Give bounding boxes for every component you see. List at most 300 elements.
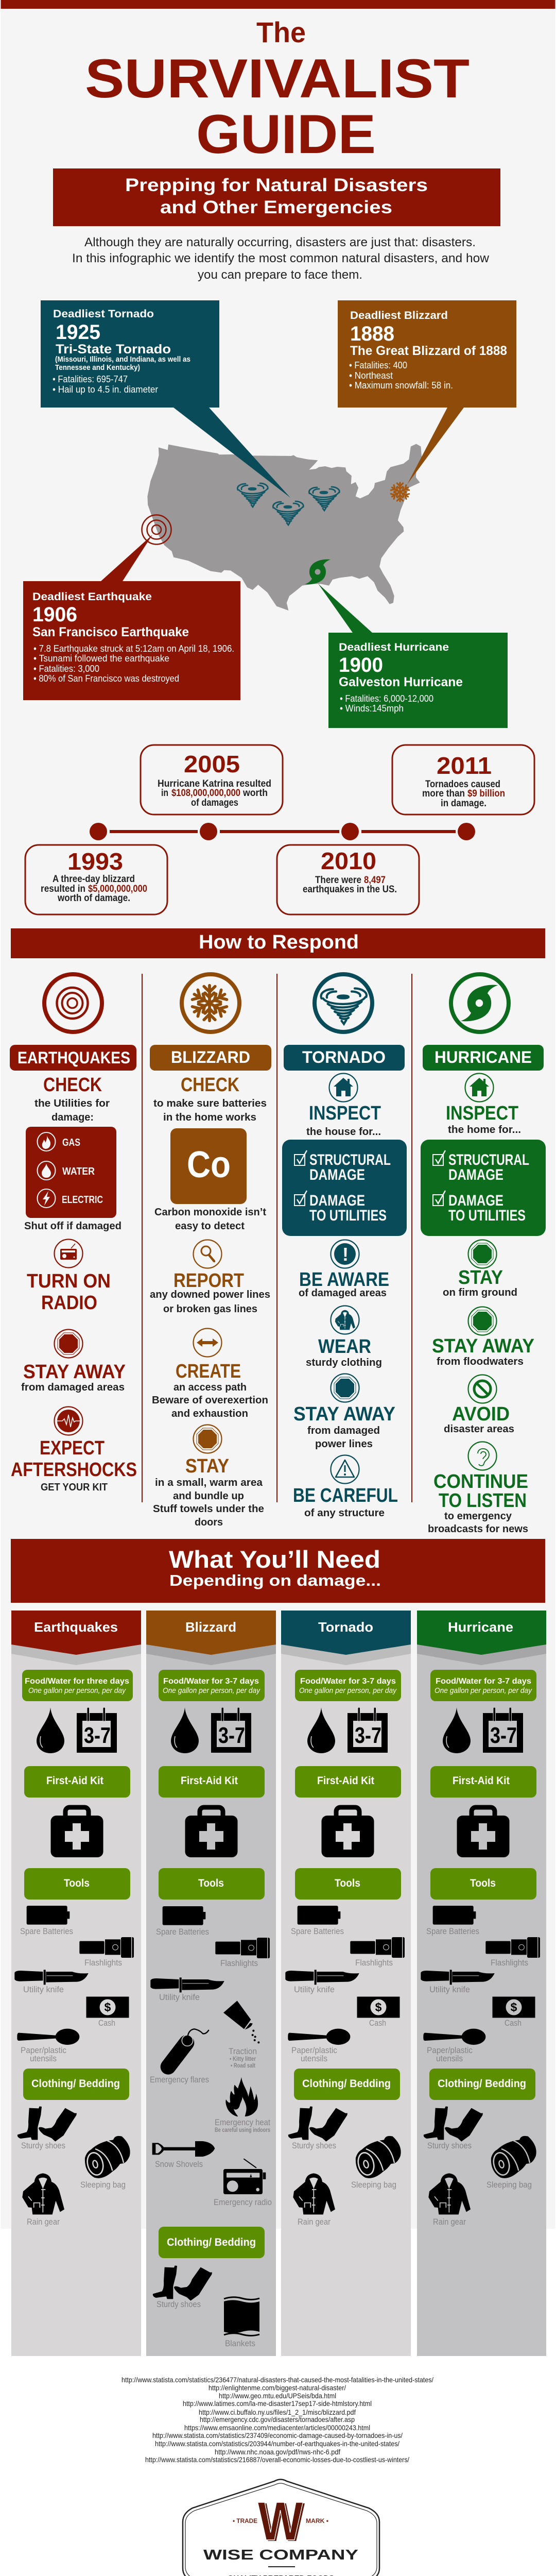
item: cash [86, 1997, 129, 2028]
icon: stop [331, 1374, 359, 1402]
step: check utilities [34, 1074, 110, 1123]
item: cash: $ [105, 2001, 111, 2014]
step: stay: doors [195, 1517, 223, 1528]
item: traction: Traction [229, 2046, 257, 2056]
column: tornado response [282, 974, 407, 1519]
pill: first-aid kit [295, 1766, 401, 1798]
item: cash [357, 1997, 399, 2028]
icon: map tornado markers [237, 483, 339, 525]
icon: alert [331, 1240, 359, 1268]
step: expect aftershocks [11, 1437, 137, 1493]
item: rain gear: Rain gear [433, 2217, 466, 2227]
source links: http://www.ci.buffalo.ny.us/files/1_2_1/misc/blizzard.pdf [199, 2408, 356, 2416]
subtitle banner [53, 168, 500, 226]
text: carbon monoxide note: easy to detect [175, 1221, 245, 1232]
text: shut off: Shut off if damaged [24, 1221, 121, 1232]
panel: deadliest hurricane: • Fatalities: 6,000-12,000 [340, 693, 433, 704]
item: sturdy shoes [288, 2106, 348, 2150]
panel: blizzard supplies [146, 1611, 276, 2356]
icon: no entry [468, 1375, 496, 1403]
panel: deadliest blizzard: • Fatalities: 400 [349, 360, 407, 370]
icon: alert: ! [342, 1244, 349, 1265]
item: electric: ELECTRIC [62, 1194, 103, 1206]
pill: first-aid kit: First-Aid Kit [46, 1775, 103, 1787]
item: spare batteries: Spare Batteries [156, 1927, 209, 1937]
item: rain gear: Rain gear [298, 2217, 331, 2227]
item: cash: Cash [98, 2018, 115, 2028]
step: check utilities: CHECK [43, 1074, 102, 1096]
item: blankets: Blankets [225, 2338, 255, 2348]
step: inspect [306, 1103, 381, 1138]
panel: deadliest earthquake: • Tsunami followed the earthquake [33, 653, 169, 664]
heading: what you'll need: Depending on damage... [169, 1571, 381, 1589]
pill: tools [430, 1868, 536, 1900]
item: sleeping bag [486, 2136, 536, 2190]
item: gas: GAS [62, 1137, 80, 1148]
icon: house [465, 1074, 493, 1101]
item: cash: $ [375, 2001, 382, 2014]
title: GUIDE [196, 103, 376, 165]
step: report: any downed power lines [150, 1289, 270, 1300]
pill: tools [295, 1868, 401, 1900]
pill: tools: Tools [198, 1877, 224, 1889]
item: sturdy shoes [153, 2265, 212, 2309]
header: hurricane: HURRICANE [435, 1048, 532, 1066]
item: emergency radio: Emergency radio [214, 2197, 272, 2207]
step: continue to listen: broadcasts for news [428, 1523, 528, 1535]
item: sturdy shoes [424, 2106, 483, 2150]
item: utility knife: Utility knife [23, 1985, 64, 1994]
header: blizzard: Blizzard [185, 1619, 236, 1635]
panel: deadliest tornado: • Fatalities: 695-747 [53, 374, 128, 384]
icon: water drop [37, 1707, 64, 1753]
item: cash: Cash [505, 2018, 522, 2028]
timeline card: 2005: in [161, 788, 168, 799]
step: stay away: from damaged [307, 1425, 380, 1436]
panel: deadliest blizzard: • Maximum snowfall: 58 in. [349, 380, 453, 391]
item: sturdy shoes: Sturdy shoes [427, 2141, 472, 2150]
step: avoid: AVOID [452, 1403, 510, 1425]
text: structural damage: STRUCTURAL [448, 1151, 529, 1168]
panel: deadliest earthquake: 1906 [32, 603, 77, 626]
item: sturdy shoes [18, 2106, 77, 2150]
item: blankets [224, 2297, 259, 2348]
icon: calendar: 3-7 [355, 1723, 381, 1748]
panel: deadliest tornado: 1925 [56, 321, 100, 344]
pill: clothing and bedding [294, 2069, 400, 2100]
panel: deadliest blizzard: 1888 [350, 323, 394, 345]
icon: stop [55, 1329, 82, 1358]
panel: deadliest tornado: Tri-State Tornado [56, 342, 171, 357]
icon: stop [468, 1240, 496, 1268]
item: utility knife: Utility knife [294, 1985, 335, 1994]
timeline card: 1993 [25, 845, 167, 914]
panel: deadliest blizzard [338, 300, 516, 484]
panel: deadliest tornado: • Hail up to 4.5 in. diameter [53, 384, 158, 395]
pill: tools: Tools [470, 1877, 496, 1889]
pill: clothing and bedding: Clothing/ Bedding [31, 2078, 120, 2090]
panel: carbon monoxide [170, 1128, 247, 1204]
pill: clothing and bedding [23, 2069, 129, 2100]
header: earthquakes: Earthquakes [34, 1619, 118, 1635]
step: be careful [293, 1485, 398, 1519]
timeline card: 2005: 2005 [184, 751, 240, 777]
item: electric [37, 1189, 103, 1208]
timeline card: 2010 [277, 845, 419, 914]
text: damage to utilities: DAMAGE [448, 1192, 503, 1209]
step: stay away [432, 1335, 534, 1367]
step: stay away: STAY AWAY [432, 1335, 534, 1357]
pill: first-aid kit [430, 1766, 536, 1798]
icon: calendar [77, 1707, 117, 1753]
item: traction: • Kitty litter [230, 2055, 256, 2062]
step: stay away: power lines [315, 1438, 373, 1450]
text: damage to utilities: TO UTILITIES [309, 1207, 387, 1224]
icon: first-aid kit [321, 1807, 374, 1857]
item: spare batteries [20, 1906, 73, 1936]
pill: first-aid kit: First-Aid Kit [181, 1775, 238, 1787]
step: check utilities: the Utilities for [34, 1098, 110, 1109]
panel: hurricane supplies [417, 1611, 546, 2356]
icon: blizzard circle [182, 974, 239, 1032]
item: water [37, 1161, 95, 1180]
step: report: or broken gas lines [163, 1303, 257, 1315]
panel: deadliest earthquake: • 7.8 Earthquake struck at 5:12am on April 18, 1906. [33, 643, 234, 654]
step: continue to listen: CONTINUE [433, 1471, 528, 1493]
item: utensils: Paper/plastic [21, 2045, 66, 2055]
item: utensils: utensils [30, 2054, 57, 2063]
panel: deadliest earthquake [23, 535, 240, 700]
source links: http://emergency.cdc.gov/disasters/tornadoes/after.asp [200, 2415, 355, 2424]
icon: map earthquake marker [142, 515, 171, 544]
item: cash [492, 1997, 535, 2028]
source links [121, 2376, 433, 2464]
item: flashlights [79, 1937, 134, 1968]
header: hurricane [423, 1045, 544, 1071]
item: snow shovels: Snow Shovels [155, 2159, 203, 2169]
step: turn on radio: RADIO [41, 1292, 97, 1314]
timeline axis [90, 823, 475, 840]
logo: Wise Company: MARK • [306, 2517, 328, 2524]
item: rain gear [22, 2173, 64, 2227]
icon: calendar: 3-7 [84, 1723, 111, 1748]
timeline card: 2010: earthquakes in the US. [303, 884, 397, 895]
item: utility knife [150, 1977, 224, 2002]
step: wear: WEAR [318, 1336, 371, 1358]
subtitle banner: Prepping for Natural Disasters [125, 175, 428, 195]
heading: how to respond [11, 928, 545, 958]
timeline card: 2011: $9 billion [467, 788, 505, 799]
header: blizzard [146, 1611, 276, 1655]
item: spare batteries: Spare Batteries [291, 1926, 344, 1936]
pill: food and water: One gallon per person, per day [299, 1687, 397, 1695]
step: avoid [444, 1403, 514, 1435]
icon: radio [55, 1240, 82, 1267]
timeline card: 1993: 1993 [67, 848, 123, 875]
pill: clothing and bedding [159, 2227, 265, 2258]
item: utensils [288, 2029, 350, 2063]
step: stay: in a small, warm area [155, 1477, 263, 1488]
text: carbon monoxide note [154, 1207, 266, 1232]
source links: http://www.statista.com/statistics/203944/number-of-earthquakes-in-the-united-states/ [155, 2439, 399, 2448]
item: rain gear [428, 2173, 471, 2227]
step: stay [153, 1455, 264, 1528]
item: emergency heat: Emergency heat [215, 2117, 270, 2127]
step: inspect: the house for... [306, 1126, 381, 1138]
step: stay away: from damaged areas [21, 1382, 125, 1393]
item: flashlights [215, 1938, 270, 1968]
item: sleeping bag: Sleeping bag [80, 2180, 126, 2190]
icon: calendar [348, 1707, 388, 1753]
text: damage to utilities: TO UTILITIES [448, 1207, 526, 1224]
step: create: CREATE [176, 1361, 241, 1382]
logo: Wise Company: W [259, 2492, 305, 2553]
pill: food and water [22, 1670, 133, 1701]
item: sleeping bag: Sleeping bag [486, 2180, 532, 2190]
step: create: an access path [173, 1382, 247, 1393]
column: blizzard response [150, 974, 271, 1528]
panel: deadliest hurricane: 1900 [339, 654, 383, 676]
icon: check [294, 1191, 307, 1206]
pill: first-aid kit [24, 1766, 130, 1798]
supplies list [421, 1670, 540, 2227]
item: utility knife: Utility knife [429, 1985, 470, 1994]
item: traction [223, 2001, 259, 2069]
text: structural damage [309, 1151, 391, 1183]
panel: damage checklist [421, 1140, 546, 1236]
step: continue to listen [428, 1471, 528, 1535]
step: expect aftershocks: AFTERSHOCKS [11, 1459, 137, 1481]
step: turn on radio [27, 1270, 111, 1314]
step: be aware: BE AWARE [299, 1269, 389, 1291]
timeline card: 2005: worth [242, 788, 268, 799]
text: structural damage: DAMAGE [309, 1166, 365, 1183]
icon: map hurricane marker [305, 560, 331, 584]
item: spare batteries [426, 1906, 479, 1936]
timeline card: 2010: 8,497 [364, 875, 386, 886]
timeline card: 2011 [392, 745, 534, 815]
item: utensils [423, 2029, 485, 2063]
item: utility knife [421, 1970, 495, 1994]
icon: magnifier [194, 1240, 221, 1268]
icon: ear [468, 1442, 496, 1470]
subtitle banner: and Other Emergencies [160, 197, 392, 217]
panel: deadliest blizzard: • Northeast [349, 370, 393, 381]
icon: check [433, 1191, 445, 1206]
item: water: WATER [62, 1166, 95, 1177]
item: utensils: Paper/plastic [291, 2045, 337, 2055]
timeline card: 2005: of damages [191, 798, 238, 808]
item: utensils: Paper/plastic [427, 2045, 473, 2055]
step: be aware [299, 1269, 389, 1299]
pill: food and water: One gallon per person, per day [163, 1687, 260, 1695]
icon: first-aid kit [50, 1807, 103, 1857]
column: earthquakes response [10, 974, 137, 1493]
step: stay: and bundle up [173, 1490, 244, 1502]
header: earthquakes [10, 1045, 136, 1071]
heading: what you'll need: What You’ll Need [169, 1546, 380, 1573]
pill: food and water: Food/Water for 3-7 days [163, 1677, 259, 1686]
panel: deadliest tornado: (Missouri, Illinois, and Indiana, as well as [55, 355, 190, 364]
icon: house [329, 1074, 357, 1101]
item: rain gear [293, 2173, 335, 2227]
column: hurricane response [421, 974, 546, 1535]
header: tornado: TORNADO [302, 1048, 386, 1066]
step: wear: sturdy clothing [306, 1357, 382, 1368]
panel: deadliest tornado [41, 300, 290, 498]
step: be careful: of any structure [304, 1507, 385, 1519]
step: create [152, 1361, 268, 1419]
title: SURVIVALIST [85, 47, 470, 109]
item: flashlights: Flashlights [220, 1958, 258, 1968]
item: rain gear: Rain gear [27, 2217, 60, 2227]
item: utility knife [285, 1970, 359, 1994]
step: stay away: STAY AWAY [23, 1361, 126, 1383]
item: sturdy shoes: Sturdy shoes [21, 2141, 65, 2150]
item: spare batteries [291, 1906, 344, 1936]
timeline card: 1993: A three-day blizzard [53, 874, 135, 885]
icon: calendar [211, 1707, 251, 1753]
map: United States [147, 444, 422, 611]
step: check batteries [153, 1074, 267, 1123]
item: emergency flares [150, 2029, 209, 2084]
text: carbon monoxide note: Carbon monoxide isn’t [154, 1207, 266, 1218]
item: snow shovels [152, 2141, 215, 2169]
source links: http://www.geo.mtu.edu/UPSeis/bda.html [219, 2392, 336, 2400]
header: tornado: Tornado [318, 1619, 373, 1635]
item: flashlights [485, 1937, 540, 1968]
text: damage to utilities [309, 1192, 387, 1224]
pill: food and water [295, 1670, 401, 1701]
step: inspect: INSPECT [309, 1103, 381, 1124]
icon: water drop [443, 1707, 471, 1753]
icon: warning [331, 1455, 359, 1484]
step: stay: STAY [185, 1455, 229, 1477]
step: report [150, 1270, 270, 1315]
item: cash: $ [511, 2001, 517, 2014]
header: hurricane [417, 1611, 546, 1655]
icon: seismograph [55, 1406, 82, 1435]
text: structural damage: STRUCTURAL [309, 1151, 391, 1168]
item: utensils: utensils [436, 2054, 463, 2063]
item: flashlights: Flashlights [491, 1958, 528, 1968]
step: stay away [293, 1403, 395, 1450]
intro text: you can prepare to face them. [198, 268, 362, 282]
header: hurricane: Hurricane [448, 1619, 513, 1635]
panel: deadliest hurricane: Galveston Hurricane [339, 675, 463, 689]
timeline card: 2011: more than [422, 788, 465, 799]
text: structural damage [448, 1151, 529, 1183]
step: check batteries: to make sure batteries [153, 1098, 267, 1109]
icon: map blizzard marker [391, 483, 409, 501]
timeline card: 1993: resulted in [41, 884, 85, 894]
panel: deadliest hurricane: • Winds:145mph [340, 703, 404, 714]
intro text: Although they are naturally occurring, disasters are just that: disasters. [84, 235, 476, 249]
panel: deadliest blizzard: The Great Blizzard of 1888 [350, 344, 507, 358]
item: emergency radio [214, 2159, 272, 2207]
panel: deadliest tornado: Tennessee and Kentucky) [55, 363, 140, 372]
pill: food and water [159, 1670, 265, 1701]
text: structural damage: DAMAGE [448, 1166, 503, 1183]
item: spare batteries [156, 1906, 209, 1937]
icon: water drop [171, 1707, 199, 1753]
timeline card: 2011: 2011 [437, 752, 492, 779]
supplies list [285, 1670, 405, 2227]
step: stay: on firm ground [443, 1287, 517, 1298]
source links: http://enlightenme.com/biggest-natural-disaster/ [208, 2383, 346, 2392]
header: tornado [284, 1045, 405, 1071]
item: cash: Cash [369, 2018, 386, 2028]
step: continue to listen: TO LISTEN [439, 1490, 527, 1512]
heading: how to respond: How to Respond [199, 931, 359, 953]
step: inspect: INSPECT [446, 1103, 518, 1124]
text: damage to utilities [448, 1192, 526, 1224]
pill: food and water: One gallon per person, per day [435, 1687, 532, 1695]
panel: deadliest earthquake: • 80% of San Francisco was destroyed [33, 673, 179, 684]
panel: carbon monoxide: Co [187, 1144, 231, 1185]
title [85, 16, 470, 165]
step: report: REPORT [173, 1270, 244, 1292]
panel: deadliest earthquake: • Fatalities: 3,000 [33, 664, 99, 674]
icon: jacket [331, 1306, 359, 1334]
panel: deadliest earthquake: San Francisco Earthquake [32, 625, 189, 639]
item: sturdy shoes: Sturdy shoes [292, 2141, 336, 2150]
timeline card: 2011: in damage. [441, 798, 486, 809]
header: earthquakes: EARTHQUAKES [18, 1048, 130, 1067]
pill: food and water: Food/Water for 3-7 days [300, 1677, 396, 1686]
pill: food and water: One gallon per person, per day [28, 1687, 126, 1695]
step: be careful: BE CAREFUL [293, 1485, 398, 1506]
panel: deadliest tornado: Deadliest Tornado [53, 308, 154, 320]
item: emergency flares: Emergency flares [150, 2075, 209, 2084]
step: turn on radio: TURN ON [27, 1270, 111, 1292]
timeline card: 2005 [141, 745, 283, 815]
top bar [1, 0, 555, 9]
item: flashlights: Flashlights [355, 1958, 393, 1968]
item: spare batteries: Spare Batteries [20, 1926, 73, 1936]
header: earthquakes [11, 1611, 141, 1655]
pill: tools [159, 1868, 265, 1900]
step: expect aftershocks: EXPECT [40, 1437, 105, 1459]
icon: first-aid kit [457, 1807, 510, 1857]
pill: clothing and bedding: Clothing/ Bedding [167, 2236, 256, 2248]
step: wear [306, 1336, 382, 1368]
step: stay away: from floodwaters [437, 1356, 524, 1367]
header: blizzard: BLIZZARD [171, 1048, 250, 1066]
item: spare batteries: Spare Batteries [426, 1926, 479, 1936]
step: expect aftershocks: GET YOUR KIT [41, 1482, 108, 1493]
timeline card: 2010: 2010 [321, 848, 376, 874]
panel: deadliest hurricane [318, 584, 508, 728]
icon: water drop [307, 1707, 335, 1753]
step: check batteries: in the home works [163, 1112, 256, 1123]
step: avoid: disaster areas [444, 1423, 514, 1435]
timeline card: 1993: $5,000,000,000 [88, 884, 147, 894]
pill: food and water: Food/Water for 3-7 days [436, 1677, 531, 1686]
pill: first-aid kit: First-Aid Kit [317, 1775, 374, 1787]
item: traction: • Road salt [231, 2062, 255, 2069]
header: tornado [281, 1611, 411, 1655]
panel: deadliest earthquake: Deadliest Earthquake [32, 591, 152, 603]
item: flashlights [350, 1937, 405, 1968]
step: stay [443, 1267, 517, 1298]
icon: first-aid kit [185, 1807, 238, 1857]
item: emergency heat [215, 2077, 270, 2133]
item: sturdy shoes: Sturdy shoes [157, 2299, 201, 2309]
step: create: and exhaustion [171, 1408, 248, 1419]
item: emergency heat: Be careful using indoors [215, 2126, 270, 2133]
item: gas [37, 1132, 80, 1151]
